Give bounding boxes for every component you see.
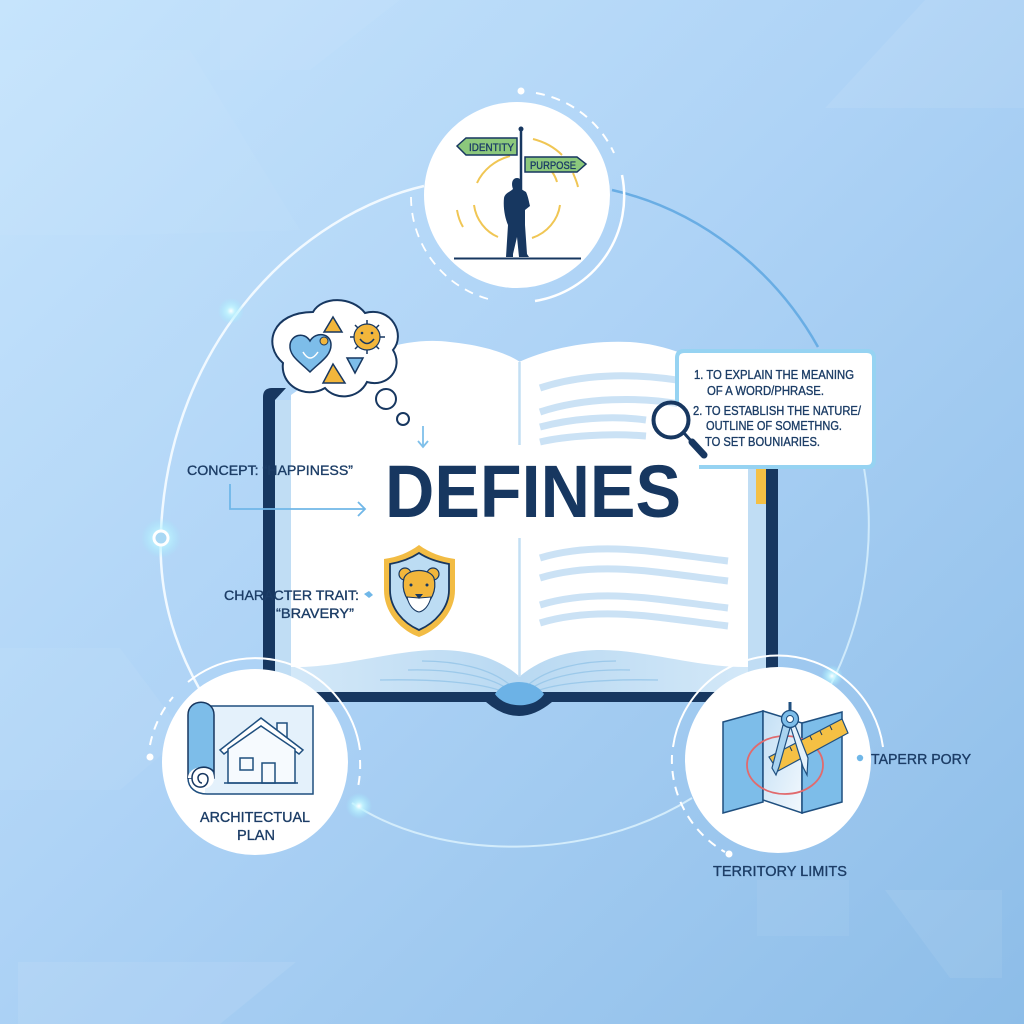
label: territory limits: TERRITORY LIMITS (713, 863, 847, 880)
icon: magnifying glass (654, 402, 704, 455)
page block under pages (291, 640, 748, 692)
spine line (518, 362, 521, 677)
label: character trait bravery: CHARACTER TRAIT: (224, 587, 359, 603)
open book (263, 341, 778, 716)
folded map (723, 711, 842, 813)
panel: territory limits (672, 656, 971, 880)
sign: purpose: PURPOSE (530, 160, 576, 172)
thought bubble (272, 300, 409, 425)
ruler (769, 719, 848, 771)
upper right page text lines (540, 376, 700, 442)
glowing ring nodes (141, 298, 843, 819)
definition text: 2. TO ESTABLISH THE NATURE/ (693, 404, 861, 418)
connecting ring (161, 186, 869, 847)
orbit ring (672, 656, 883, 858)
house (220, 718, 303, 783)
silhouette person (504, 178, 530, 257)
ground line (454, 258, 581, 260)
panel: architectural plan (146, 658, 360, 855)
orbit ring (146, 658, 360, 787)
label: concept happiness: CONCEPT: “HAPPINESS” (187, 462, 353, 478)
lower right page text lines (540, 549, 728, 626)
panel: identity and purpose (411, 88, 624, 301)
scroll (188, 702, 214, 788)
yellow arcs (457, 139, 578, 238)
arrow: concept to headline (230, 484, 365, 516)
drawing compass (772, 702, 808, 775)
red boundary ellipse (747, 736, 823, 794)
label: character trait bravery (224, 587, 359, 621)
label: character trait bravery: “BRAVERY” (276, 605, 354, 621)
right page (519, 342, 748, 677)
label: architectural plan (200, 809, 310, 844)
definition text: OUTLINE OF SOMETHNG. (706, 419, 842, 433)
label: taperr pory: TAPERR PORY (871, 751, 971, 768)
icon: lion shield (384, 545, 455, 637)
definition text: 1. TO EXPLAIN THE MEANING (694, 368, 854, 382)
sign: identity (457, 138, 517, 155)
label: architectural plan: PLAN (237, 827, 275, 844)
left page (291, 341, 520, 677)
sign: identity: IDENTITY (469, 142, 515, 154)
definition text (693, 368, 861, 449)
definition callout (677, 351, 874, 467)
sign post (520, 129, 522, 190)
label: architectural plan: ARCHITECTUAL (200, 809, 310, 826)
pointer dot: taperr pory (857, 755, 863, 761)
page fold lines (380, 661, 658, 692)
icon: heart (290, 335, 331, 372)
headline: DEFINES: DEFINES (385, 450, 681, 533)
blueprint (205, 706, 313, 794)
icon: smiling sun (350, 320, 385, 354)
orbit ring (411, 88, 624, 301)
arrow: thought to headline (418, 426, 428, 447)
book cover (263, 388, 778, 716)
spine oval (495, 682, 544, 705)
definition text: OF A WORD/PHRASE. (707, 384, 824, 398)
icon: triangles (323, 317, 363, 383)
pointer dot: bravery (364, 591, 373, 598)
yellow bookmark (756, 468, 766, 504)
definition text: TO SET BOUNIARIES. (705, 435, 820, 449)
